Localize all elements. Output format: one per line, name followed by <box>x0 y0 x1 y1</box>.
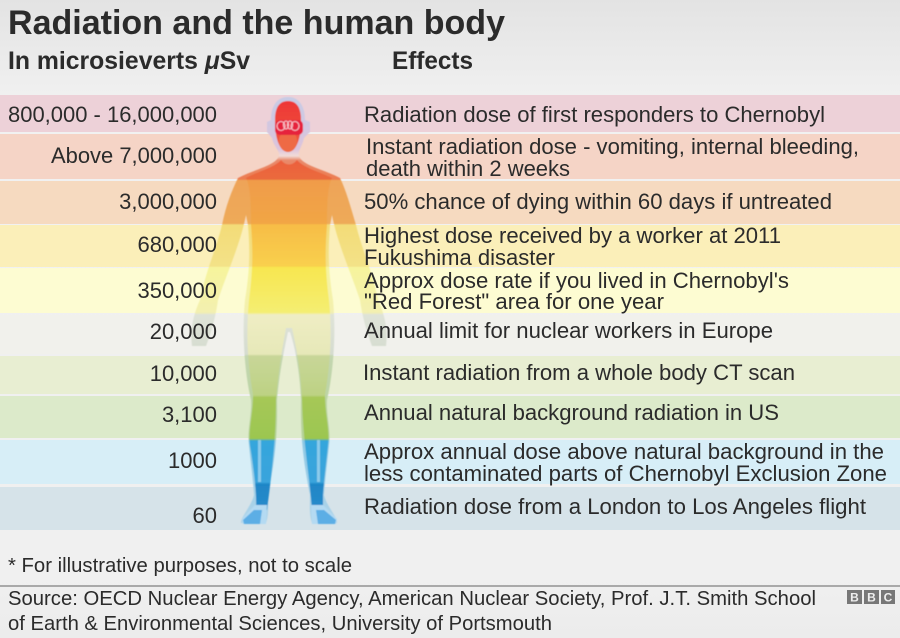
dose values: 680,000 <box>137 232 217 257</box>
effect descriptions: "Red Forest" area for one year <box>364 289 664 314</box>
source: Source: OECD Nuclear Energy Agency, American Nuclear Society, Prof. J.T. Smith School <box>8 588 816 610</box>
sinus detail <box>275 120 303 135</box>
right foot <box>311 505 337 524</box>
dose values: 3,100 <box>162 402 217 427</box>
effect descriptions: Annual natural background radiation in US <box>364 400 779 425</box>
column heading: effects: Effects <box>392 47 473 75</box>
shin bones <box>258 440 320 482</box>
source <box>8 588 816 635</box>
footnote: * For illustrative purposes, not to scale <box>8 555 352 577</box>
effect descriptions: Approx dose rate if you lived in Chernobyl's <box>364 268 789 293</box>
effect descriptions: less contaminated parts of Chernobyl Exclusion Zone <box>364 461 887 486</box>
effect descriptions: death within 2 weeks <box>366 156 570 181</box>
BBC logo <box>847 590 895 604</box>
dose values: 10,000 <box>150 361 217 386</box>
effect descriptions: Radiation dose from a London to Los Angeles flight <box>364 494 866 519</box>
dose values: 60 <box>193 503 217 528</box>
coloured dose bands <box>0 95 900 530</box>
BBC logo: B <box>867 590 876 604</box>
human body figure <box>191 97 387 524</box>
dose values: 1000 <box>168 448 217 473</box>
effect descriptions: Highest dose received by a worker at 2011 <box>364 223 781 248</box>
source: of Earth & Environmental Sciences, University of Portsmouth <box>8 613 552 635</box>
dose values: 20,000 <box>150 319 217 344</box>
effect descriptions: Annual limit for nuclear workers in Europe <box>364 318 773 343</box>
title: Radiation and the human body <box>8 4 505 42</box>
dose values: Above 7,000,000 <box>51 143 217 168</box>
effect descriptions <box>363 102 887 519</box>
dose values <box>8 102 217 528</box>
left foot <box>242 505 267 524</box>
effect descriptions: 50% chance of dying within 60 days if untreated <box>364 189 832 214</box>
effect descriptions: Instant radiation dose - vomiting, internal bleeding, <box>366 134 859 159</box>
dose values: 800,000 - 16,000,000 <box>8 102 217 127</box>
effect descriptions: Radiation dose of first responders to Chernobyl <box>364 102 825 127</box>
column heading: dose: In microsieverts μSv <box>8 47 250 75</box>
effect descriptions: Instant radiation from a whole body CT scan <box>363 360 795 385</box>
body outline and arms <box>191 97 387 523</box>
dose values: 3,000,000 <box>119 189 217 214</box>
effect descriptions: Fukushima disaster <box>364 245 555 270</box>
effect descriptions: Approx annual dose above natural background in the <box>364 439 884 464</box>
BBC logo: B <box>850 590 859 604</box>
torso and legs <box>246 160 332 510</box>
head <box>275 101 301 152</box>
face <box>279 130 297 152</box>
dose values: 350,000 <box>137 278 217 303</box>
BBC logo: C <box>884 590 893 604</box>
